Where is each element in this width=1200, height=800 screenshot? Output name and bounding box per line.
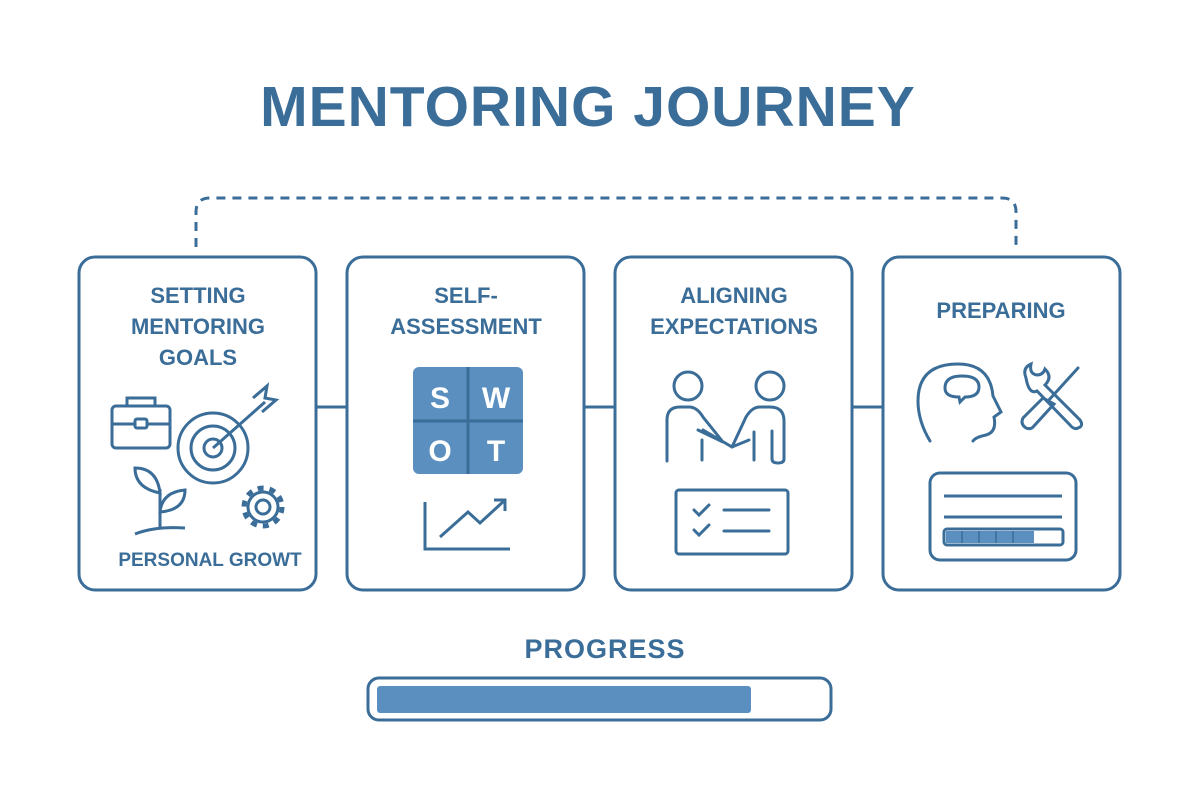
icon: progress card [930,473,1076,560]
SWOT grid: T [487,435,505,468]
icon: target [178,386,276,483]
icon: checklist [676,490,788,554]
label: personal growt: PERSONAL GROWT [118,550,302,571]
panel: aligning expectations [615,257,852,590]
icon: trend chart [425,500,510,549]
panel: aligning expectations: ALIGNING [680,283,788,308]
icon: head with brain [918,364,1001,441]
panel: self-assessment: ASSESSMENT [390,314,542,339]
panel: setting mentoring goals [79,257,316,590]
panel: preparing [883,257,1120,590]
icon: briefcase [112,398,170,448]
icon: gear [244,488,282,526]
panel: self-assessment: SELF- [434,283,498,308]
progress bar [368,678,831,720]
icon: handshake [667,372,784,463]
panel: setting mentoring goals: GOALS [159,345,237,370]
panel: setting mentoring goals: MENTORING [131,314,265,339]
icon: plant [135,468,185,534]
title: MENTORING JOURNEY [260,75,916,139]
panel: setting mentoring goals: SETTING [150,283,246,308]
SWOT grid: W [482,382,511,415]
dashed loop arrow [196,198,1016,247]
panel: aligning expectations: EXPECTATIONS [650,314,818,339]
panel: preparing: PREPARING [936,298,1066,323]
SWOT grid [413,367,523,474]
panel: self-assessment [347,257,584,590]
icon: wrench and screwdriver [1022,364,1082,429]
progress heading: PROGRESS [524,634,686,664]
SWOT grid: S [430,382,450,415]
SWOT grid: O [428,435,452,468]
connectors [316,406,883,408]
